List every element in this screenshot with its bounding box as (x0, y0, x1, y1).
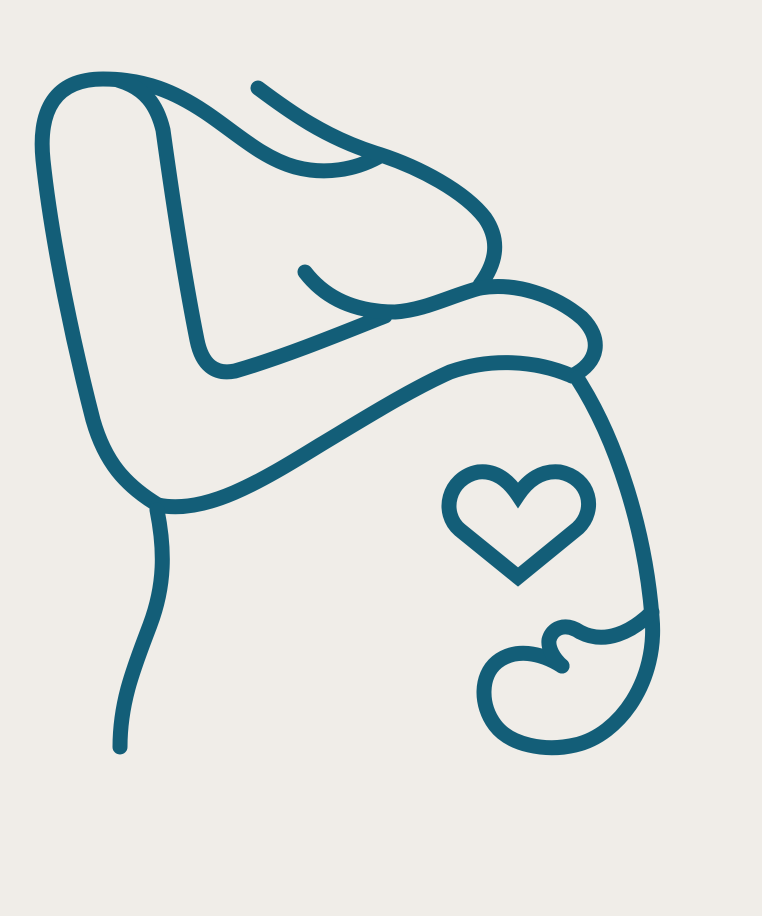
back and shoulder outline (42, 79, 380, 505)
breast (258, 88, 495, 285)
forearm lower edge (158, 363, 572, 507)
heart (449, 472, 589, 577)
baby curve (549, 612, 652, 666)
belly and baby bottom curve (484, 378, 653, 748)
lower back (120, 510, 162, 747)
under-breast line (305, 272, 480, 312)
inner arm (118, 80, 385, 372)
hand (480, 287, 595, 376)
